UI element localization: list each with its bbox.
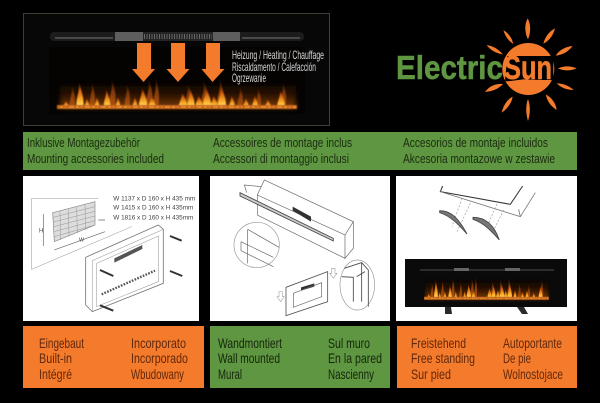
label: wall mounted: Sul muro [328,335,370,351]
logo: ElectricSun [396,18,577,121]
control bar [50,32,304,41]
dimensions: W 1415 x D 160 x H 435mm [113,206,193,212]
dimensions: W 1137 x D 160 x H 435 mm [113,196,195,202]
wall unit with rail [240,180,353,258]
wall and brick opening: W [79,238,85,244]
label: built-in: Incorporado [131,350,188,366]
label: free standing: Autoportante [503,335,562,351]
dimensions [113,196,195,222]
green band: mounting accessories: Accessoires de montage inclus [213,135,352,150]
label: built-in: Eingebaut [39,335,84,351]
panel: wall mounted diagram [210,176,390,321]
label: built-in: Built-in [39,350,72,366]
logo: ElectricSun: Sun [504,49,552,86]
label: built-in: Wbudowany [131,366,184,382]
label: wall mounted: Nascienny [328,366,374,382]
wall and brick opening: H [39,229,43,235]
green band: mounting accessories: Mounting accessories included [27,151,164,166]
label: built-in: Incorporato [131,335,186,351]
green band: mounting accessories [23,132,577,170]
dimensions: W 1816 x D 160 x H 435mm [113,216,193,222]
label: built-in: Intégré [39,366,72,382]
wordmark: Electric [396,49,503,86]
label: free standing [397,326,577,388]
sun icon [485,18,577,121]
fireplace photo on stand [405,259,567,314]
green band: mounting accessories: Accessori di montaggio inclusi [213,151,349,166]
label: free standing: Wolnostojace [503,366,563,382]
label: free standing: Sur pied [411,366,451,382]
heating label: Ogrzewanie [232,71,266,85]
heating label: Riscaldamento / Calefacción [232,60,316,74]
heating arrows [132,43,224,82]
fireplace photo [24,14,330,126]
panel: free standing diagram and photo [396,176,577,321]
label: free standing: Free standing [411,350,475,366]
panel: built-in diagram [23,176,199,321]
label: free standing: Freistehend [411,335,466,351]
front view [277,268,337,316]
label: wall mounted: Wandmontiert [218,335,282,351]
feet assembly diagram [440,186,535,240]
heating label [232,48,324,85]
bracket detail [234,222,279,268]
label: wall mounted [210,326,390,388]
firebox with flames [49,47,305,114]
green band: mounting accessories: Accesorios de montaje incluidos [403,135,548,150]
green band: mounting accessories: Akcesoria montazowe w zestawie [403,151,555,166]
side detail [340,260,375,310]
fireplace box with screws [86,225,182,312]
heating label: Heizung / Heating / Chauffage [232,48,324,62]
label: built-in [23,326,204,388]
green band: mounting accessories: Inklusive Montagezubehör [27,135,140,150]
label: wall mounted: Wall mounted [218,350,280,366]
label: free standing: De pie [503,350,531,366]
label: wall mounted: En la pared [328,350,382,366]
wall and brick opening [32,198,132,269]
label: wall mounted: Mural [218,366,242,382]
